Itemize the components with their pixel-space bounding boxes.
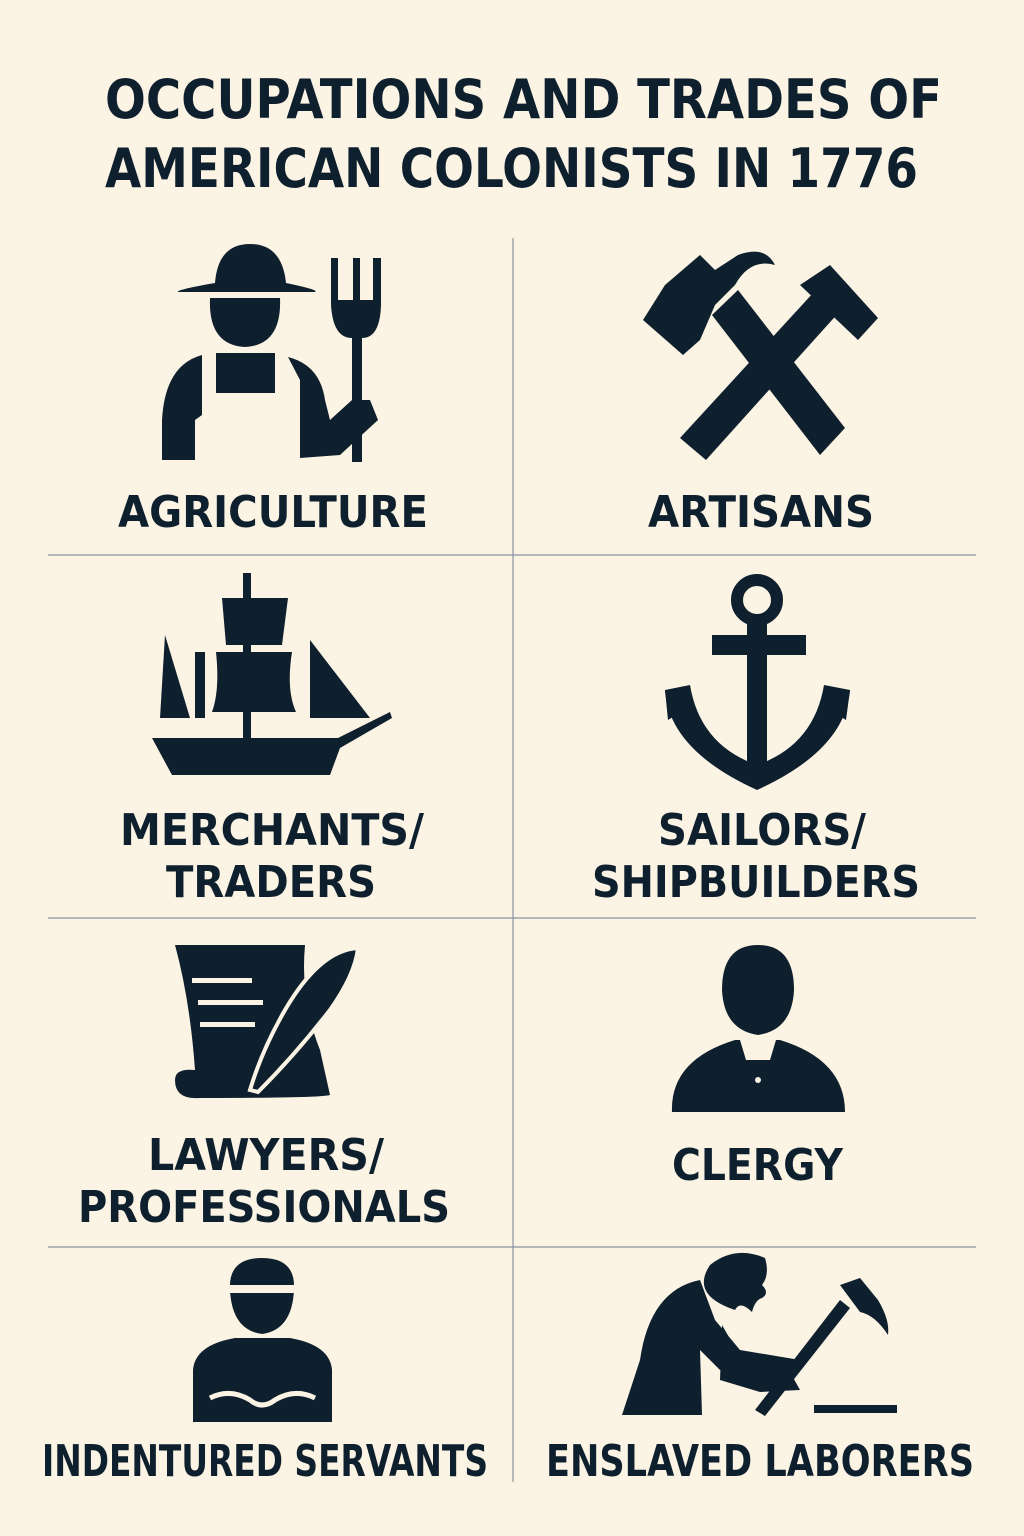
panel: clergy bbox=[672, 945, 845, 1191]
icon: servant with shackles bbox=[193, 1258, 332, 1422]
panel: merchants: TRADERS bbox=[166, 857, 376, 908]
label: indentured servants: INDENTURED SERVANTS bbox=[42, 1436, 488, 1487]
label: agriculture: AGRICULTURE bbox=[118, 487, 428, 538]
label: sailors: SAILORS/ bbox=[658, 805, 867, 856]
panel: lawyers: PROFESSIONALS bbox=[78, 1182, 450, 1233]
label: lawyers: LAWYERS/ bbox=[148, 1130, 385, 1181]
title: OCCUPATIONS AND TRADES OF bbox=[105, 68, 942, 131]
panel: artisans bbox=[643, 252, 878, 538]
icon: anchor bbox=[665, 580, 850, 790]
panel: sailors bbox=[592, 580, 920, 908]
icon: scroll and quill bbox=[175, 945, 358, 1098]
icon: clergyman bbox=[672, 945, 845, 1112]
panel: agriculture bbox=[118, 244, 428, 538]
panel: merchants bbox=[120, 573, 425, 908]
label: clergy: CLERGY bbox=[672, 1140, 844, 1191]
panel: enslaved laborers bbox=[546, 1253, 974, 1487]
icon: ship bbox=[152, 573, 392, 775]
panel: lawyers bbox=[78, 945, 450, 1233]
label: artisans: ARTISANS bbox=[648, 487, 874, 538]
icon: crossed hammers bbox=[643, 252, 878, 460]
panel: sailors: SHIPBUILDERS bbox=[592, 857, 920, 908]
title: AMERICAN COLONISTS IN 1776 bbox=[105, 137, 918, 200]
icon: laborer with hammer bbox=[622, 1253, 897, 1416]
icon: farmer with pitchfork bbox=[162, 244, 381, 462]
title bbox=[105, 68, 942, 200]
label: merchants: MERCHANTS/ bbox=[120, 805, 425, 856]
panel: indentured servants bbox=[42, 1258, 488, 1487]
